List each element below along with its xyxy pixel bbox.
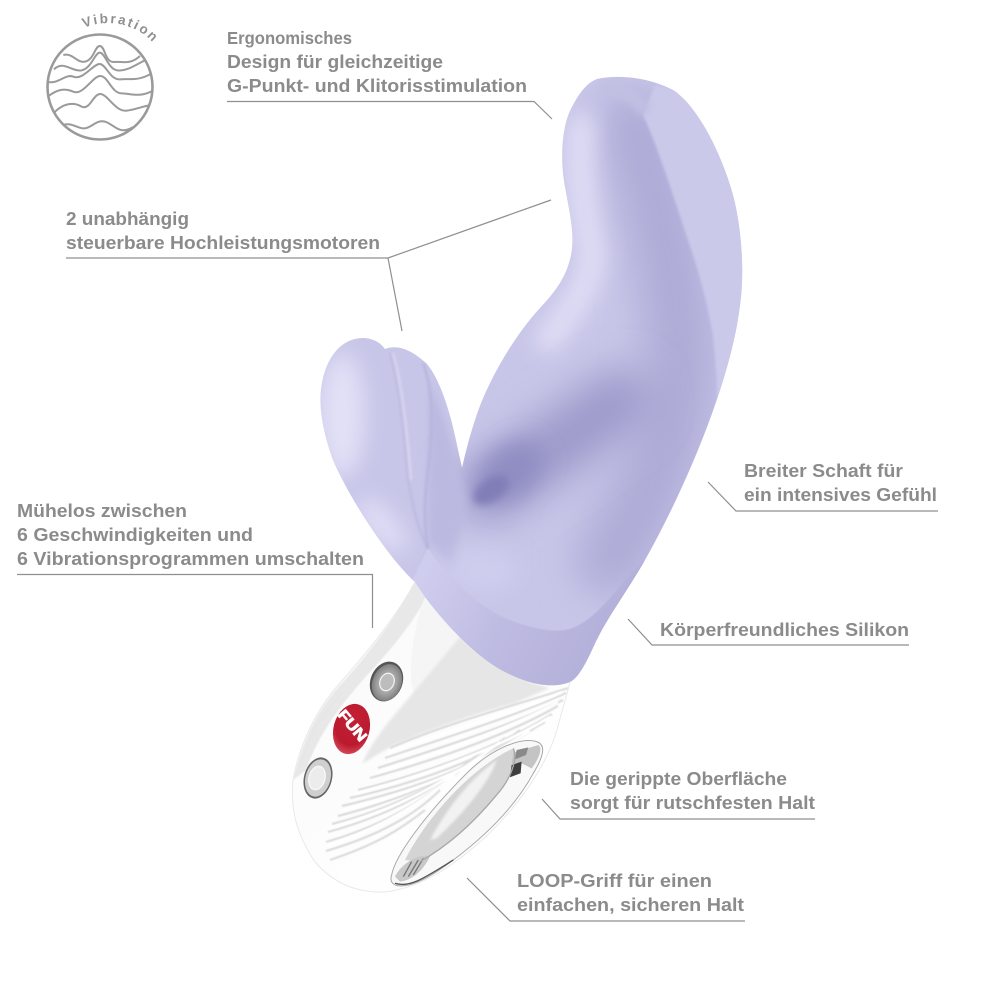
top edge band [632, 100, 644, 112]
right facet [644, 87, 742, 394]
front mid highlight [453, 560, 455, 564]
button: lower [299, 754, 337, 802]
button: upper [364, 656, 409, 707]
callout: LOOP grip [467, 871, 745, 921]
icon label: Vibration: Vibration [81, 14, 156, 42]
product: silicone body [320, 77, 760, 700]
callout: wide shaft: Breiter Schaft für [744, 461, 903, 481]
lobe highlights [320, 353, 364, 477]
callout: motors: 2 unabhängig [66, 209, 189, 229]
lobe creases [394, 369, 422, 535]
callout: ribbed surface: Die gerippte Oberfläche [570, 769, 787, 789]
callout: ribbed surface: sorgt für rutschfesten Halt [570, 793, 815, 813]
callout: ergonomic design: Design für gleichzeitige [227, 52, 443, 72]
callout: motors [66, 200, 551, 331]
icon: vibration [46, 14, 156, 141]
shaft central shadow [610, 125, 680, 560]
callout: motors: steuerbare Hochleistungsmotoren [66, 233, 380, 253]
button: FUN logo: FUN [334, 707, 370, 745]
right lobe shade [430, 401, 456, 554]
callout: speeds and programs: Mühelos zwischen [17, 501, 187, 521]
collar band [420, 549, 644, 686]
callout: speeds and programs [17, 501, 372, 628]
callout: wide shaft [708, 461, 938, 511]
callout: ribbed surface [542, 769, 815, 819]
callout: speeds and programs: 6 Geschwindigkeiten und [17, 525, 253, 545]
callout: silicone [628, 619, 909, 645]
product: LOOP grip [391, 741, 543, 886]
callout: ergonomic design: G-Punkt- und Klitorisstimulation [227, 76, 527, 96]
product: handle [292, 580, 570, 892]
callout: ergonomic design: Ergonomisches [227, 28, 352, 48]
callout: ergonomic design [227, 28, 552, 119]
crotch shadow [488, 400, 620, 490]
button: FUN logo [328, 700, 375, 758]
tip and waist highlight [548, 125, 592, 340]
product: controls [299, 656, 409, 802]
callout: wide shaft: ein intensives Gefühl [744, 485, 937, 505]
callout: silicone: Körperfreundliches Silikon [660, 620, 909, 640]
callout: LOOP grip: LOOP-Griff für einen [517, 871, 712, 891]
callout: speeds and programs: 6 Vibrationsprogrammen umschalten [17, 549, 364, 569]
callout: LOOP grip: einfachen, sicheren Halt [517, 895, 744, 915]
